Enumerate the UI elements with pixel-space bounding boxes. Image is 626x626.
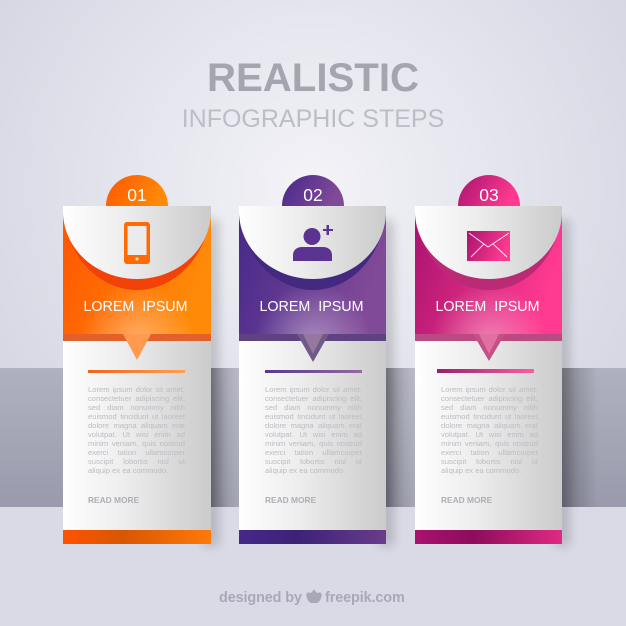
body text: dolore magna aliquam erat — [265, 421, 362, 430]
heading: LOREM IPSUM — [259, 299, 364, 315]
body text — [88, 385, 185, 475]
body text: Lorem ipsum dolor sit amet, — [265, 385, 362, 394]
number tab — [282, 175, 344, 206]
number: 03 — [479, 185, 499, 205]
bottom bar — [63, 530, 211, 544]
footer credit: designed by — [219, 590, 302, 606]
card shadow — [203, 220, 239, 546]
bottom bar — [239, 530, 386, 544]
curved cap shadow — [239, 214, 386, 290]
body text — [441, 385, 538, 475]
card body — [63, 341, 211, 530]
curved cap — [63, 206, 211, 279]
body text: minim veniam, quis nostrud — [265, 439, 362, 448]
read more: READ MORE — [265, 495, 316, 505]
pointer — [473, 334, 505, 361]
body text: aliquip ex ea commodo. — [265, 466, 345, 475]
body text: euismod tincidunt ut laoreet — [441, 412, 538, 421]
body text: volutpat. Ut wisi enim ad — [441, 430, 538, 439]
title: REALISTIC — [207, 55, 419, 100]
card body — [415, 341, 562, 530]
body text: dolore magna aliquam erat — [88, 421, 185, 430]
body text: suscipit lobortis nisl ut — [88, 457, 185, 466]
coloured header — [239, 206, 386, 341]
body text: aliquip ex ea commodo. — [441, 466, 521, 475]
body text: Lorem ipsum dolor sit amet, — [88, 385, 185, 394]
body text: suscipit lobortis nisl ut — [441, 457, 538, 466]
subtitle: INFOGRAPHIC STEPS — [182, 105, 444, 133]
coloured header — [63, 206, 211, 341]
divider line — [88, 370, 185, 373]
number tab — [458, 175, 520, 206]
body text: sed diam nonummy nibh — [265, 403, 362, 412]
panel: step 01 — [63, 175, 239, 550]
number tab — [106, 175, 168, 206]
icon: add user — [293, 225, 333, 261]
body text: aliquip ex ea commodo. — [88, 466, 168, 475]
pointer — [297, 334, 329, 362]
number: 02 — [303, 185, 323, 205]
body text: volutpat. Ut wisi enim ad — [265, 430, 362, 439]
header stripe — [415, 334, 562, 341]
body text: consectetuer adipiscing elit, — [441, 394, 538, 403]
heading: LOREM IPSUM — [435, 299, 540, 315]
body text: sed diam nonummy nibh — [88, 403, 185, 412]
divider line — [265, 370, 362, 373]
footer credit: freepik.com — [325, 590, 405, 606]
header stripe — [63, 334, 211, 341]
body text: sed diam nonummy nibh — [441, 403, 538, 412]
body text: dolore magna aliquam erat — [441, 421, 538, 430]
divider line — [437, 369, 534, 373]
body text: exerci tation ullamcorper — [265, 448, 362, 457]
curved cap — [239, 206, 386, 279]
icon: phone — [124, 222, 150, 264]
curved cap shadow — [415, 214, 562, 290]
body text: minim veniam, quis nostrud — [88, 439, 185, 448]
card body — [239, 341, 386, 530]
pointer — [123, 334, 151, 360]
panel: step 02 — [239, 175, 415, 550]
body text — [265, 385, 362, 475]
read more: READ MORE — [441, 495, 492, 505]
body text: exerci tation ullamcorper — [441, 448, 538, 457]
icon: envelope — [467, 231, 510, 261]
body text: volutpat. Ut wisi enim ad — [88, 430, 185, 439]
card shadow — [378, 220, 415, 546]
body text: exerci tation ullamcorper — [88, 448, 185, 457]
footer credit — [219, 589, 405, 606]
body text: euismod tincidunt ut laoreet — [265, 412, 362, 421]
curved cap shadow — [63, 214, 211, 290]
coloured header — [415, 206, 562, 341]
header stripe — [239, 334, 386, 341]
body text: consectetuer adipiscing elit, — [265, 394, 362, 403]
body text: euismod tincidunt ut laoreet — [88, 412, 185, 421]
body text: suscipit lobortis nisl ut — [265, 457, 362, 466]
panel: step 03 — [415, 175, 592, 550]
body text: minim veniam, quis nostrud — [441, 439, 538, 448]
read more: READ MORE — [88, 495, 139, 505]
curved cap — [415, 206, 562, 279]
bottom bar — [415, 530, 562, 544]
number: 01 — [127, 185, 147, 205]
heading: LOREM IPSUM — [83, 299, 188, 315]
card shadow — [554, 220, 598, 546]
body text: Lorem ipsum dolor sit amet, — [441, 385, 538, 394]
body text: consectetuer adipiscing elit, — [88, 394, 185, 403]
